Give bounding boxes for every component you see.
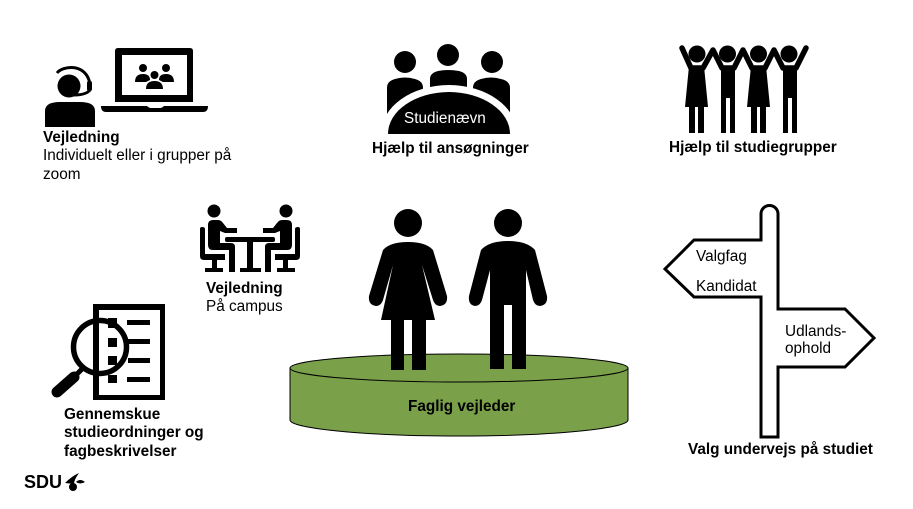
icon: signpost: Valgfag bbox=[696, 248, 747, 265]
platform: green cylinder: Faglig vejleder bbox=[408, 398, 515, 415]
text: Vejledning campus bbox=[206, 280, 283, 315]
text: Gennemskue: fagbeskrivelser bbox=[64, 443, 177, 460]
icon: signpost: ophold bbox=[785, 340, 831, 357]
icon: study board bbox=[380, 44, 518, 183]
icon: laptop with group bbox=[101, 48, 208, 112]
figure: man bbox=[469, 209, 547, 369]
text: Vejledning zoom: Individuelt eller i grupper på bbox=[43, 147, 232, 164]
icon: study board: Studienævn bbox=[404, 110, 486, 127]
text: Gennemskue bbox=[64, 406, 204, 460]
heading: Hjælp til ansøgninger: Hjælp til ansøgninger bbox=[372, 140, 529, 157]
icon: meeting at table bbox=[200, 204, 300, 272]
text: Vejledning campus: På campus bbox=[206, 298, 283, 315]
icon: advisor with headset bbox=[45, 67, 95, 127]
text: Gennemskue: studieordninger og bbox=[64, 424, 204, 441]
text: Gennemskue: Gennemskue bbox=[64, 406, 160, 423]
platform: green cylinder bbox=[290, 354, 628, 436]
text: Vejledning zoom: zoom bbox=[43, 166, 80, 183]
icon: signpost: Kandidat bbox=[696, 278, 757, 295]
text: Vejledning campus: Vejledning bbox=[206, 280, 283, 297]
icon: signpost: Udlands- bbox=[785, 323, 846, 340]
text: Vejledning zoom bbox=[43, 129, 232, 183]
logo: SDU: SDU bbox=[24, 472, 62, 492]
icon: document with magnifier bbox=[57, 304, 165, 400]
heading: Hjælp til studiegrupper: Hjælp til studiegrupper bbox=[669, 139, 837, 156]
logo: SDU bbox=[24, 472, 85, 492]
icon: study group bbox=[682, 46, 806, 133]
text: Vejledning zoom: Vejledning bbox=[43, 129, 120, 146]
figure: woman bbox=[369, 209, 447, 370]
icon: signpost bbox=[665, 206, 874, 437]
heading: Valg undervejs på studiet: Valg undervejs på studiet bbox=[688, 441, 873, 458]
